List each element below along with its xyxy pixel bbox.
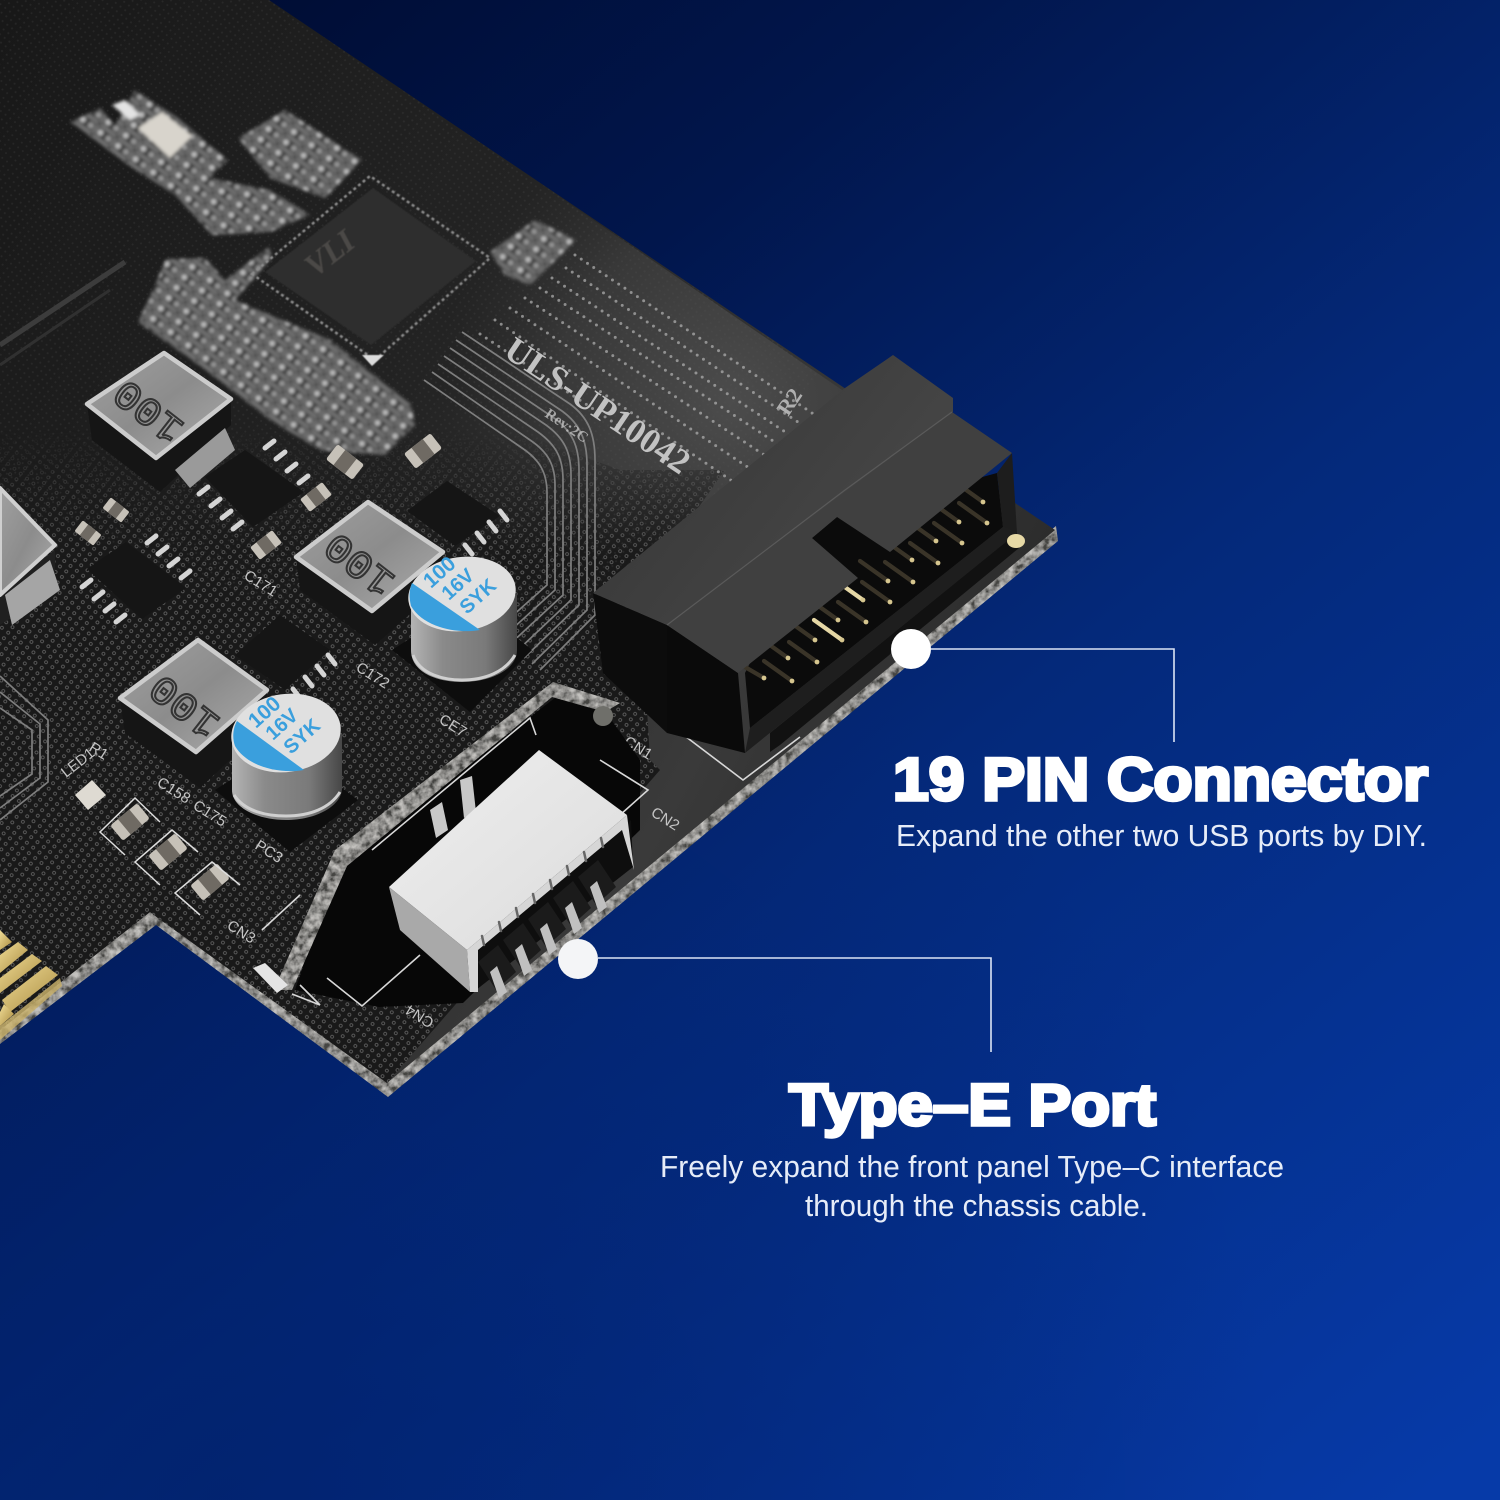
silkscreen model number: R2: [771, 384, 807, 420]
PCB edge thickness: [0, 526, 1058, 1097]
silkscreen outline under connector: [677, 730, 800, 780]
metal frame strip: [274, 682, 620, 990]
description: Expand the other two USB ports by DIY.: [896, 818, 1427, 853]
inductors: [0, 353, 443, 788]
silkscreen component labels: CN2: [648, 804, 682, 834]
heading: 19 PIN Connector: [893, 746, 1428, 813]
Type-E port assembly: [253, 682, 648, 1007]
leader line: [598, 958, 991, 1052]
port metal shield: [389, 750, 627, 950]
19 pin connector: [593, 355, 1019, 780]
solder dot texture: [0, 0, 724, 1083]
silkscreen component labels: CN4: [403, 1001, 437, 1031]
PCB board surface: [0, 0, 1055, 1083]
description: through the chassis cable.: [805, 1188, 1148, 1223]
black port zone: [295, 697, 640, 1007]
marker dot: [891, 629, 931, 669]
port opening: [476, 820, 633, 990]
silkscreen component labels: C172: [353, 659, 392, 692]
connector side face: [667, 625, 745, 753]
description: [660, 1149, 1284, 1223]
inductor lower: [120, 640, 267, 788]
VLI controller chip: [252, 176, 490, 366]
connector rear block side: [593, 593, 667, 733]
silkscreen component labels: CN3: [224, 917, 258, 947]
silkscreen model number: ULS-UP10042: [498, 329, 698, 482]
connector front block top: [667, 412, 1012, 673]
silkscreen component labels: PC3: [252, 837, 286, 867]
connector right post: [997, 453, 1017, 533]
port spring contacts: [478, 860, 616, 990]
silkscreen component labels: CN1: [621, 733, 655, 763]
inductor lower: 100: [142, 663, 230, 745]
connector front lip: [745, 527, 1017, 753]
grey zone behind connector: [400, 90, 845, 590]
silkscreen component labels: CE7: [436, 711, 470, 741]
port contact tips: [490, 881, 607, 998]
capacitor lower: 100: [244, 692, 285, 733]
port contacts row: [430, 776, 476, 838]
capacitor upper: [392, 550, 532, 712]
right side via rows: [480, 255, 845, 483]
capacitor lower: [215, 687, 358, 852]
description: Freely expand the front panel Type–C interface: [660, 1149, 1284, 1184]
silkscreen model number: [498, 329, 807, 482]
heading: Type–E Port: [789, 1073, 1156, 1138]
header pins: [745, 482, 987, 681]
silkscreen component labels: C175: [190, 797, 229, 830]
pad: [253, 963, 288, 993]
blurred surface-mount clusters: [70, 90, 576, 455]
callout: 19 PIN Connector: [891, 629, 1428, 853]
crystal: [138, 112, 192, 158]
PCB card: [0, 0, 1058, 1097]
silkscreen component labels: C158: [154, 774, 193, 807]
callout: Type-E Port: [558, 939, 1284, 1223]
capacitor lower: 16V: [262, 704, 303, 745]
connector rear block top: [593, 355, 953, 625]
power bead: [112, 100, 140, 120]
mounting pad: [593, 706, 613, 726]
capacitor lower: SYK: [280, 714, 325, 759]
corner mount hole: [1007, 534, 1025, 548]
black regulator chips: [82, 441, 507, 698]
silkscreen model number: Rev:2C: [542, 406, 591, 446]
board traces: [0, 262, 595, 820]
silkscreen component labels: LED1: [58, 745, 98, 781]
silkscreen component labels: [58, 567, 682, 1031]
capacitor upper: SYK: [456, 574, 501, 619]
capacitor upper: 16V: [438, 564, 479, 605]
inductor middle: 100: [317, 521, 405, 603]
silkscreen component labels: R1: [86, 739, 111, 764]
capacitor upper: 100: [419, 552, 460, 593]
inductor top: 100: [106, 368, 194, 450]
VLI controller chip: VLI: [297, 221, 363, 284]
marker dot: [558, 939, 598, 979]
silkscreen outlines: [262, 718, 648, 1006]
small SMD parts: [74, 433, 442, 915]
silkscreen component labels: C171: [241, 567, 280, 600]
inductor top: [87, 353, 235, 492]
gold edge fingers: [0, 930, 62, 1040]
inductor middle: [296, 502, 443, 645]
leader line: [931, 649, 1174, 742]
socket interior: [745, 473, 1003, 728]
connector ridge highlight: [667, 412, 952, 625]
inductor far left: [0, 488, 60, 625]
shield teeth: [482, 838, 603, 945]
